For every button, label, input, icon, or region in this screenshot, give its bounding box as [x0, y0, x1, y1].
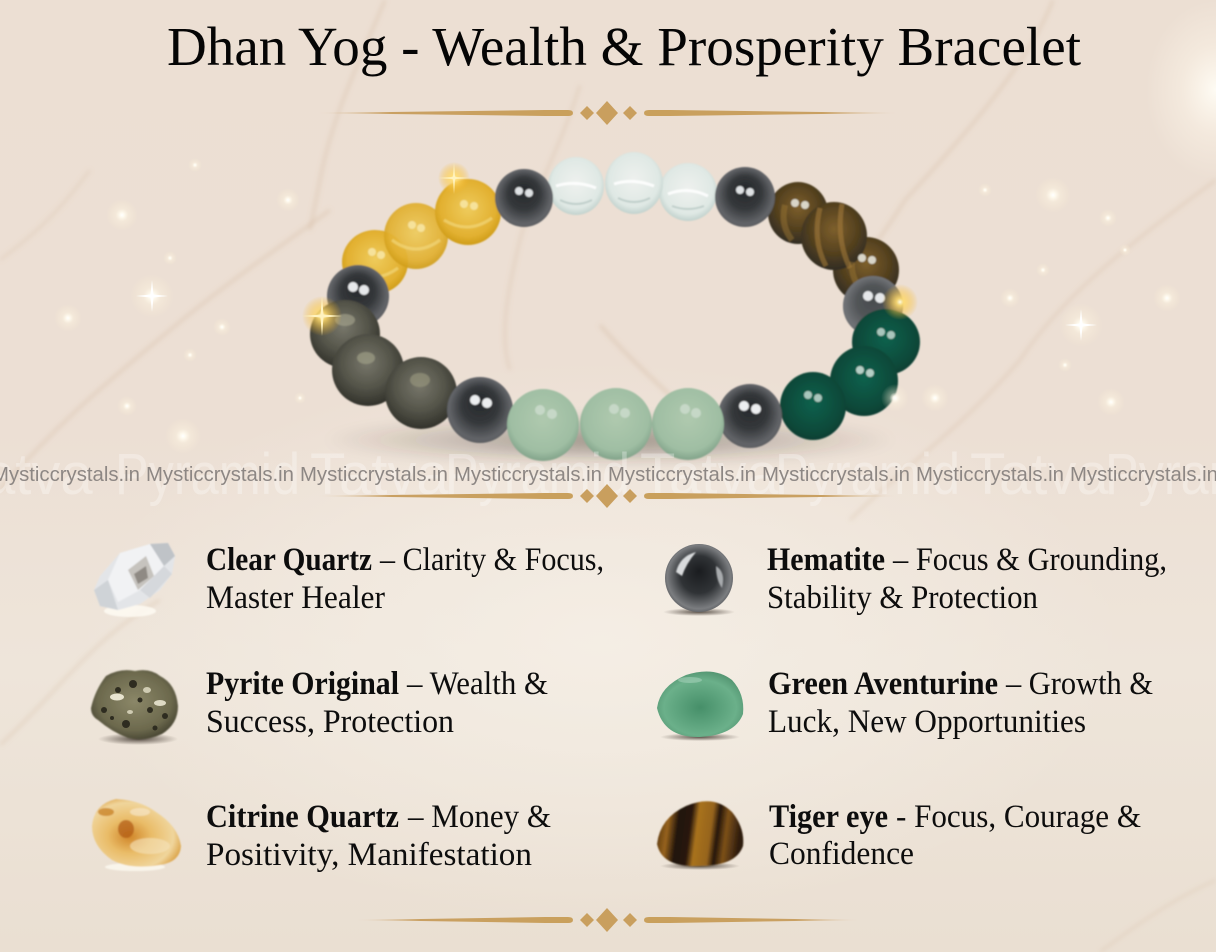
text: Clear Quartz: Master Healer	[206, 580, 385, 616]
watermark: Tatva Pyramid: Pyramid	[445, 442, 630, 507]
text: Clear Quartz: – Clarity & Focus,	[379, 542, 604, 578]
text: Pyrite Original: Pyrite Original	[206, 666, 399, 702]
divider: middle ornament	[315, 484, 900, 508]
gold glints	[302, 162, 918, 412]
text: Green Aventurine: Luck, New Opportunities	[768, 704, 1086, 740]
text: Tiger eye	[769, 799, 1141, 872]
green aventurine beads, front	[507, 388, 724, 461]
text: Pyrite Original: Success, Protection	[206, 704, 454, 740]
watermark: Tatva Pyramid: Pyramid	[775, 442, 960, 507]
icon: pyrite nugget	[91, 670, 178, 745]
hematite beads, back	[327, 167, 903, 336]
text: Green Aventurine	[768, 666, 1153, 740]
icon: citrine stone	[92, 799, 181, 871]
watermark: Tatva Pyramid: Tatva	[640, 442, 779, 507]
text: Hematite: Hematite	[767, 542, 885, 578]
item: Clear Quartz	[94, 542, 604, 617]
watermark: Tatva Pyramid: Tatva	[970, 442, 1109, 507]
item: Citrine Quartz	[92, 799, 551, 873]
text: Tiger eye: - Focus, Courage &	[896, 799, 1141, 835]
text: Citrine Quartz: – Money &	[407, 799, 551, 835]
text: Hematite: Stability & Protection	[767, 580, 1038, 616]
text: Citrine Quartz: Positivity, Manifestation	[206, 837, 532, 873]
citrine beads, back left	[342, 179, 501, 294]
watermark: Mysticcrystals.in: Mysticcrystals.in	[146, 464, 294, 486]
watermark: Mysticcrystals.in: Mysticcrystals.in	[300, 464, 448, 486]
hematite beads, front	[447, 377, 782, 448]
text: Citrine Quartz	[206, 799, 551, 873]
title: Dhan Yog - Wealth & Prosperity Bracelet	[167, 16, 1081, 77]
divider: bottom ornament	[355, 908, 860, 932]
watermark: Mysticcrystals.in: Mysticcrystals.in	[762, 464, 910, 486]
watermark: Tatva Pyramid: Pyramid	[115, 442, 300, 507]
text: Tiger eye: Confidence	[769, 836, 914, 872]
icon: clear quartz crystal	[94, 543, 175, 617]
green beads, right	[780, 309, 920, 440]
clear quartz beads, back	[548, 152, 717, 221]
bracelet shadow	[320, 416, 900, 464]
watermark: Mysticcrystals.in: Mysticcrystals.in	[454, 464, 602, 486]
text: Clear Quartz: Clear Quartz	[206, 542, 372, 578]
text: Green Aventurine: – Growth &	[1005, 666, 1153, 702]
tiger eye beads, back right	[768, 182, 899, 303]
watermark: Mysticcrystals.in: Mysticcrystals.in	[608, 464, 756, 486]
icon: tiger eye stone	[657, 801, 743, 870]
watermark: Mysticcrystals.in: Mysticcrystals.in	[916, 464, 1064, 486]
bracelet beads	[310, 152, 920, 461]
watermark: Tatva Pyramid: Tatva	[310, 442, 449, 507]
item: Green Aventurine	[657, 666, 1153, 741]
text: Citrine Quartz: Citrine Quartz	[206, 799, 399, 835]
text: Green Aventurine: Green Aventurine	[768, 666, 998, 702]
icon: green aventurine stone	[657, 671, 743, 741]
text: Clear Quartz	[206, 542, 604, 616]
text: Hematite	[767, 542, 1167, 616]
bracelet	[302, 152, 920, 464]
item: Tiger eye	[657, 799, 1141, 872]
icon: hematite sphere	[663, 544, 735, 616]
item: Hematite	[663, 542, 1167, 616]
divider: top ornament	[315, 101, 900, 125]
watermark: Tatva Pyramid	[0, 442, 1216, 507]
watermark: Mysticcrystals.in	[0, 464, 1216, 486]
text: Hematite: – Focus & Grounding,	[892, 542, 1167, 578]
text: Tiger eye: Tiger eye	[769, 799, 888, 835]
text: Pyrite Original	[206, 666, 548, 740]
watermark: Mysticcrystals.in: Mysticcrystals.in	[1070, 464, 1216, 486]
sparkles	[54, 158, 1181, 454]
pyrite beads, front left	[310, 300, 457, 429]
text: Pyrite Original: – Wealth &	[406, 666, 548, 702]
item: Pyrite Original	[91, 666, 548, 745]
